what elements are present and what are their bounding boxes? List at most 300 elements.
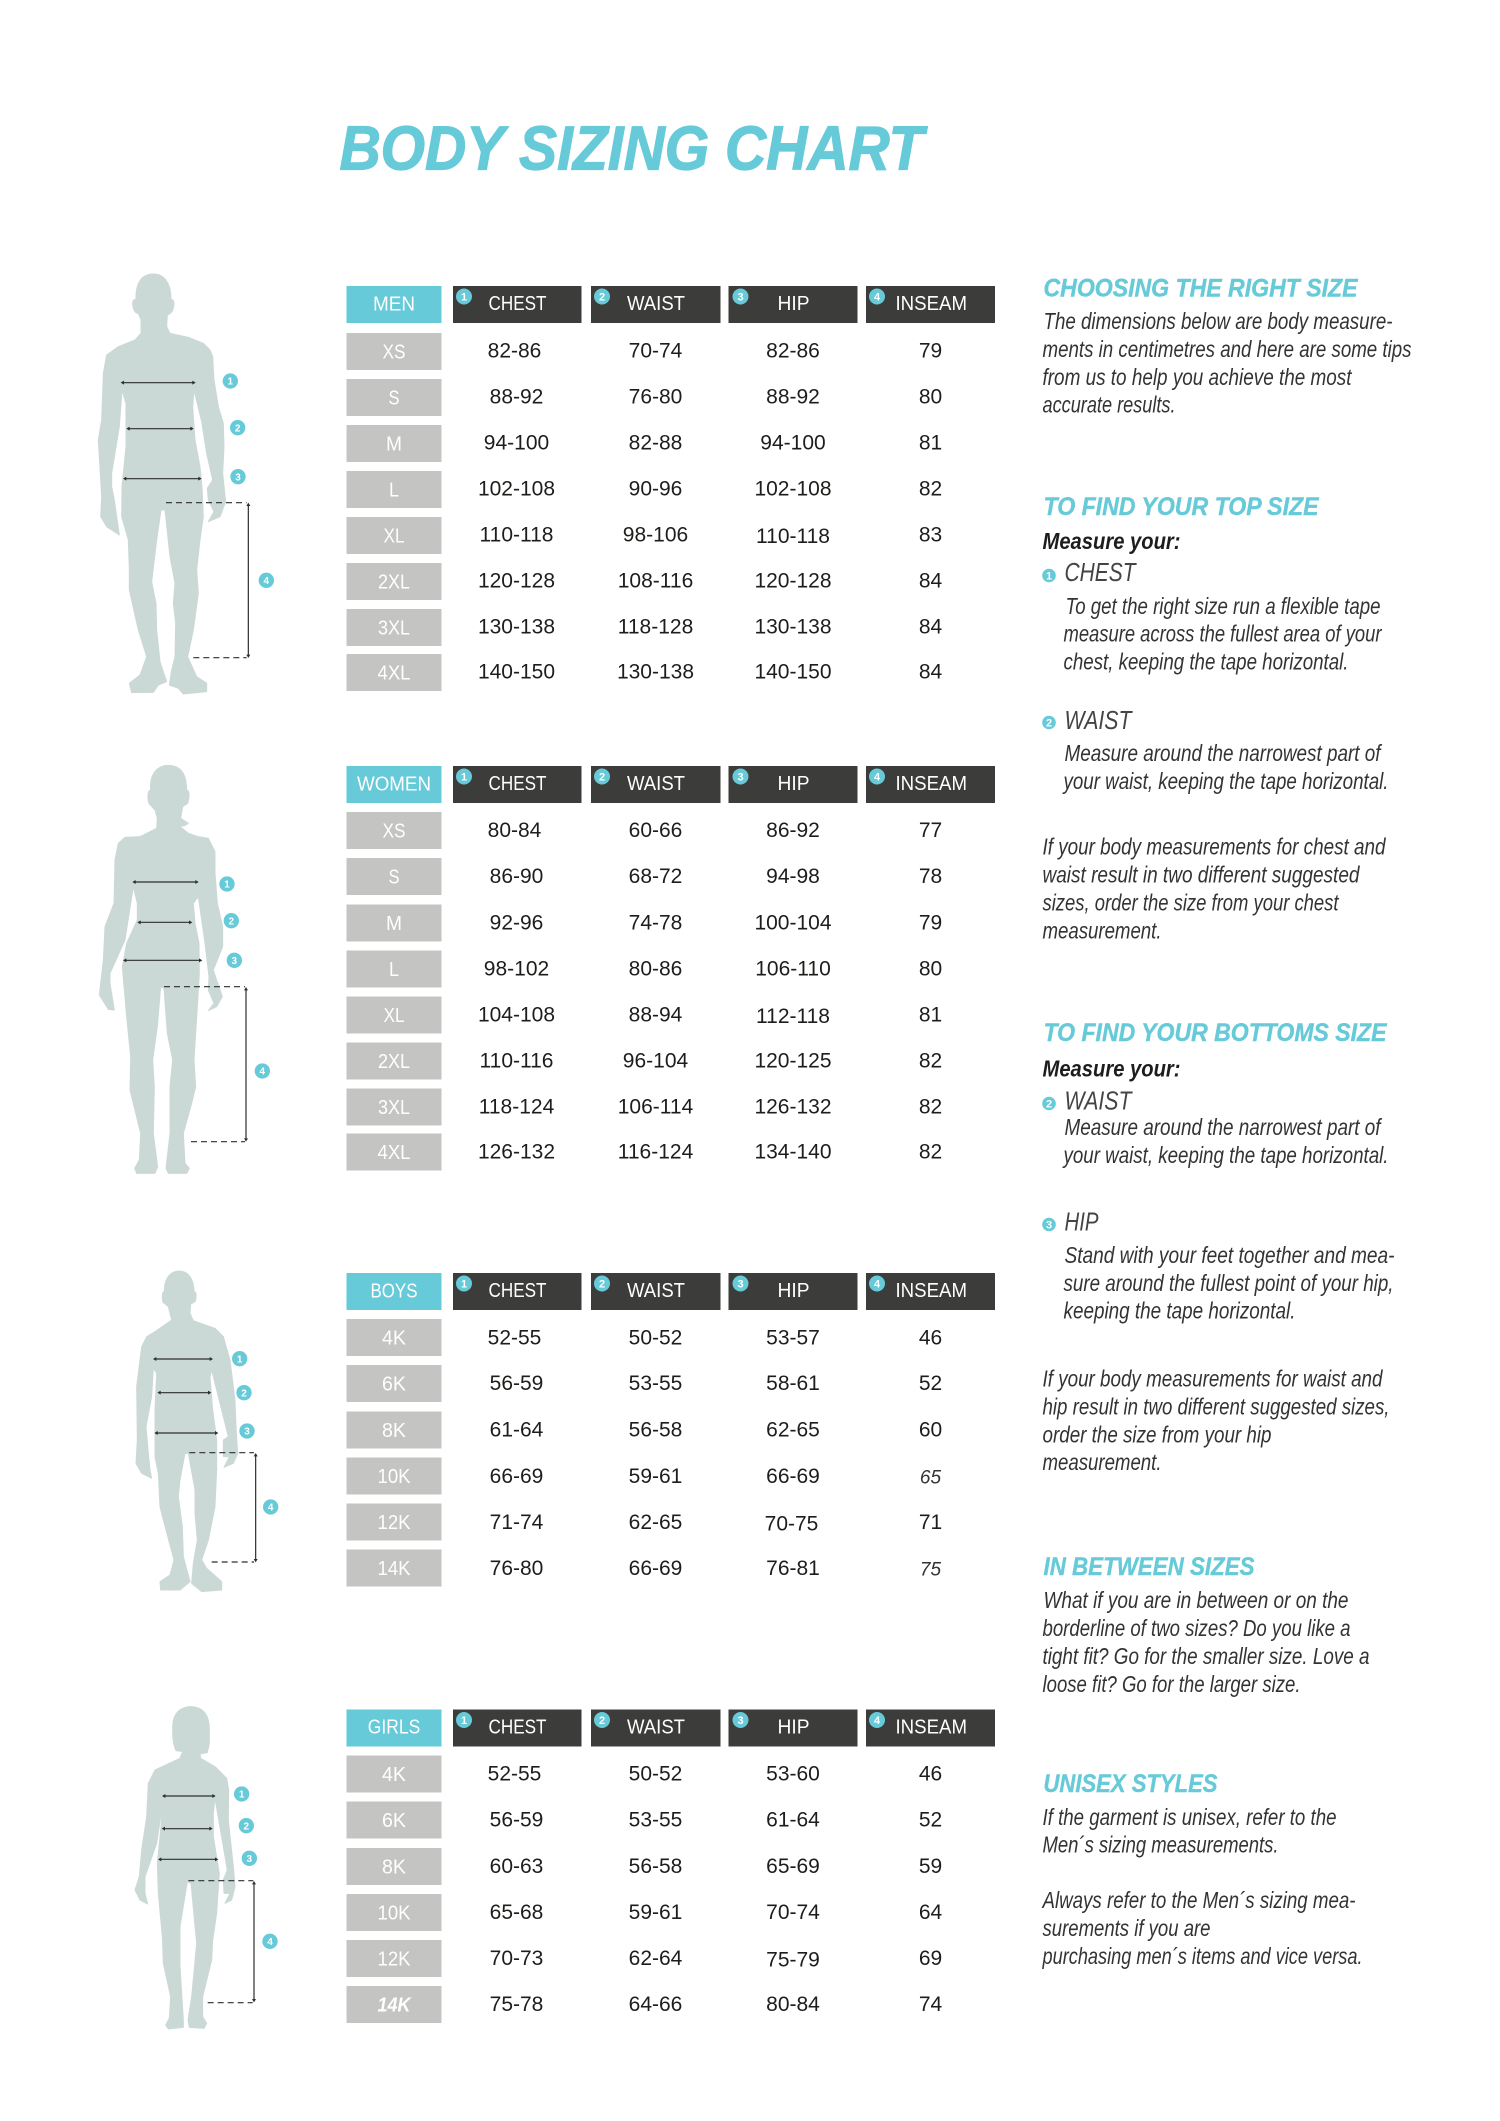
heading: CHOOSING THE RIGHT SIZE <box>1044 274 1359 302</box>
row 4K <box>346 1756 942 1792</box>
measurement lines: boys <box>153 1357 258 1562</box>
row 6K: 52 <box>919 1808 942 1832</box>
row 4XL: 4XL <box>378 1142 410 1164</box>
badge 2: 2 <box>229 916 235 927</box>
row 10K: 59-61 <box>629 1901 682 1924</box>
row XL: 81 <box>919 1004 942 1026</box>
row XS: 60-66 <box>629 819 682 842</box>
measurement lines: men <box>121 381 250 658</box>
row 3XL <box>346 609 942 646</box>
chest heading: 1 <box>1046 570 1052 582</box>
silhouette: woman <box>99 765 223 1173</box>
waist text: Measure around the narrowest part of <box>1064 1114 1383 1140</box>
note text: measurement. <box>1042 918 1162 944</box>
panel: unisex styles <box>1041 1770 1362 1969</box>
hip heading: 3 <box>1046 1220 1052 1232</box>
row 3XL: 84 <box>919 616 942 638</box>
row 8K: 8K <box>382 1856 407 1878</box>
row S: 78 <box>919 865 942 888</box>
row XL: 110-118 <box>756 525 830 548</box>
row 4XL: 140-150 <box>478 660 555 684</box>
heading: IN BETWEEN SIZES <box>1044 1553 1255 1581</box>
badge 4: 4 <box>260 1067 266 1078</box>
waist heading: 2 <box>1046 718 1052 730</box>
row L: 106-110 <box>755 958 831 980</box>
header row: men <box>346 286 995 323</box>
header row: women: 2 <box>599 772 605 784</box>
row S <box>346 379 942 416</box>
waist text: Measure around the narrowest part of <box>1064 740 1383 766</box>
waist heading: WAIST <box>1064 705 1133 735</box>
row 6K: 6K <box>382 1810 407 1832</box>
header row: girls: GIRLS <box>368 1716 420 1738</box>
row 10K: 64 <box>919 1901 942 1924</box>
row 10K: 65 <box>920 1468 941 1488</box>
row L: 82 <box>919 478 942 500</box>
text: What if you are in between or on the <box>1044 1587 1348 1613</box>
header row: girls: 4 <box>874 1715 881 1727</box>
row L: 102-108 <box>478 478 555 500</box>
header row: boys: HIP <box>778 1280 810 1302</box>
row L: 80-86 <box>629 958 682 980</box>
header row: women <box>346 766 995 803</box>
text <box>1042 1587 1370 1697</box>
row 4K: 52-55 <box>488 1326 541 1350</box>
row 6K: 6K <box>382 1374 407 1396</box>
row 3XL: 118-128 <box>618 616 693 638</box>
row 8K <box>346 1848 942 1885</box>
hip text: Stand with your feet together and mea- <box>1064 1242 1395 1268</box>
waist heading <box>1042 1086 1133 1116</box>
note text <box>1042 1366 1390 1475</box>
subheading: Measure your: <box>1042 1056 1180 1082</box>
figure: boys <box>136 1271 278 1592</box>
row 6K: 52 <box>919 1372 942 1395</box>
row 8K: 62-65 <box>766 1418 820 1442</box>
row L: 90-96 <box>629 478 682 500</box>
row 4K: 50-52 <box>629 1326 682 1350</box>
header row: women: 3 <box>737 772 744 784</box>
note text <box>1042 834 1386 944</box>
row XS <box>346 333 942 370</box>
row S: 88-92 <box>766 386 820 408</box>
row 2XL: 120-128 <box>754 570 832 592</box>
badge 1: 1 <box>239 1790 245 1801</box>
row 2XL <box>346 563 942 600</box>
row 2XL <box>346 1042 942 1080</box>
row XL <box>346 517 942 554</box>
header row: girls: 1 <box>461 1715 467 1727</box>
row 6K: 53-55 <box>629 1808 682 1832</box>
row 6K: 56-59 <box>490 1372 543 1395</box>
header row: men: 3 <box>737 292 744 304</box>
row M <box>346 425 942 462</box>
panel: choosing the right size <box>1042 274 1412 418</box>
header row: women: WOMEN <box>357 774 431 796</box>
waist text: your waist, keeping the tape horizontal. <box>1062 768 1388 794</box>
row S: 80 <box>919 386 942 408</box>
row 14K: 80-84 <box>766 1993 820 2016</box>
row 14K: 14K <box>378 1994 412 2016</box>
panel: bottoms size <box>1042 1019 1395 1475</box>
row 8K: 65-69 <box>766 1855 820 1878</box>
intro text: from us to help you achieve the most <box>1042 364 1353 390</box>
row XS: 86-92 <box>766 819 820 842</box>
row 4XL: 82 <box>919 1140 942 1164</box>
text one: Men´s sizing measurements. <box>1042 1832 1278 1858</box>
row XL: 98-106 <box>623 524 688 546</box>
silhouette: man <box>98 274 226 694</box>
heading: TO FIND YOUR TOP SIZE <box>1044 493 1320 521</box>
row 6K: 53-55 <box>629 1372 682 1395</box>
header row: boys: WAIST <box>627 1280 685 1302</box>
waist text <box>1062 740 1388 794</box>
row XL: 88-94 <box>629 1004 683 1026</box>
header row: women: 4 <box>874 772 881 784</box>
row 4K: 4K <box>382 1764 407 1786</box>
chest text <box>1064 593 1383 674</box>
row 4XL: 116-124 <box>618 1140 694 1164</box>
header row: girls: HIP <box>778 1716 810 1738</box>
subheading: Measure your: <box>1042 528 1180 554</box>
row 4XL <box>346 1134 942 1170</box>
row M: 74-78 <box>629 912 682 934</box>
intro text <box>1042 308 1412 418</box>
hip heading <box>1042 1206 1099 1236</box>
row S: S <box>388 866 400 888</box>
header row: women: CHEST <box>488 773 546 795</box>
badge 1 <box>234 1786 249 1802</box>
row M: 82-88 <box>629 432 682 454</box>
waist text <box>1062 1114 1388 1168</box>
header row: men: MEN <box>373 294 415 316</box>
table: girls <box>346 1710 995 2023</box>
row XS: 79 <box>919 340 942 362</box>
row S: 68-72 <box>629 865 682 888</box>
header row: girls: WAIST <box>627 1716 685 1738</box>
intro text: accurate results. <box>1042 392 1176 418</box>
row 4K: 53-60 <box>766 1762 820 1786</box>
row 4XL: 134-140 <box>754 1140 832 1164</box>
row 3XL: 130-138 <box>478 616 555 638</box>
row 2XL: 120-128 <box>478 570 555 592</box>
row M: 92-96 <box>490 912 543 934</box>
note text: order the size from your hip <box>1042 1422 1272 1448</box>
row 10K: 59-61 <box>629 1465 682 1488</box>
row 4K: 46 <box>919 1762 942 1786</box>
row 4XL: 4XL <box>378 662 410 684</box>
badge 3 <box>239 1423 255 1439</box>
header row: girls <box>346 1710 995 1746</box>
chest heading: CHEST <box>1064 557 1137 587</box>
row 6K: 61-64 <box>766 1808 820 1832</box>
row 6K: 56-59 <box>490 1808 543 1832</box>
header row: boys: 4 <box>874 1278 881 1290</box>
row 2XL: 108-116 <box>618 570 693 592</box>
row 3XL <box>346 1088 942 1126</box>
note text: If your body measurements for chest and <box>1042 834 1386 860</box>
badge 3 <box>230 469 246 484</box>
header row: boys: CHEST <box>488 1280 546 1302</box>
row 12K: 70-73 <box>490 1947 543 1970</box>
row 4K: 52-55 <box>488 1762 541 1786</box>
row XS: XS <box>382 820 406 842</box>
row M <box>346 904 942 942</box>
badge 3: 3 <box>232 956 238 967</box>
row S: 94-98 <box>766 865 820 888</box>
row 14K: 66-69 <box>629 1557 682 1580</box>
header row: men: 4 <box>874 292 881 304</box>
badge 4: 4 <box>264 576 270 587</box>
row 12K: 12K <box>378 1512 411 1534</box>
badge 3 <box>227 953 242 968</box>
row XL: 104-108 <box>478 1004 555 1026</box>
row 8K: 60 <box>919 1418 942 1442</box>
chest text: To get the right size run a flexible tape <box>1066 593 1380 619</box>
row 3XL: 118-124 <box>479 1096 555 1118</box>
header row: women: 1 <box>461 772 467 784</box>
row 8K: 56-58 <box>629 1418 682 1442</box>
header row: girls: INSEAM <box>896 1716 967 1738</box>
measurement lines: women <box>123 880 248 1142</box>
header row: boys: INSEAM <box>896 1280 967 1302</box>
row S <box>346 858 942 895</box>
row 4XL: 140-150 <box>754 660 832 684</box>
row S: 86-90 <box>490 865 543 888</box>
row 10K: 66-69 <box>490 1465 543 1488</box>
header row: girls: 2 <box>599 1715 605 1727</box>
header row: boys: 1 <box>461 1278 467 1290</box>
row 10K: 10K <box>378 1902 411 1924</box>
row 3XL: 106-114 <box>618 1096 694 1118</box>
note text: waist result in two different suggested <box>1042 862 1360 888</box>
row S: 88-92 <box>490 386 543 408</box>
badge 4: 4 <box>268 1503 274 1514</box>
header row: men: WAIST <box>627 293 685 315</box>
row L: 102-108 <box>754 478 832 500</box>
badge 2 <box>224 913 239 928</box>
waist heading <box>1042 705 1133 735</box>
text two: surements if you are <box>1042 1915 1210 1941</box>
row M: M <box>386 913 402 935</box>
text one <box>1042 1804 1336 1858</box>
header row: boys: BOYS <box>370 1280 418 1302</box>
badge 2 <box>230 420 245 435</box>
badge 3: 3 <box>235 472 241 483</box>
header row: men: 2 <box>599 292 605 304</box>
badge 2: 2 <box>244 1821 250 1832</box>
row 8K: 61-64 <box>490 1418 544 1442</box>
waist text: your waist, keeping the tape horizontal. <box>1062 1142 1388 1168</box>
badge 2: 2 <box>241 1388 247 1399</box>
row 12K: 12K <box>378 1948 411 1970</box>
header row: girls: 3 <box>737 1715 744 1727</box>
row XS: XS <box>382 342 406 364</box>
row XS: 82-86 <box>766 340 820 362</box>
row 10K <box>346 1894 942 1931</box>
row 3XL: 126-132 <box>754 1096 832 1118</box>
row 12K <box>346 1504 942 1540</box>
row 2XL: 110-116 <box>480 1050 553 1072</box>
panel: in between sizes <box>1042 1553 1370 1697</box>
row M: M <box>386 434 402 456</box>
row XL: 110-118 <box>480 524 553 546</box>
note text: hip result in two different suggested sizes, <box>1042 1394 1390 1420</box>
row 8K: 59 <box>919 1855 942 1878</box>
row XL: 112-118 <box>756 1005 830 1028</box>
row 14K: 76-81 <box>766 1557 820 1580</box>
text two <box>1041 1887 1362 1969</box>
row S: S <box>388 388 400 410</box>
row 8K <box>346 1412 942 1448</box>
note text: If your body measurements for waist and <box>1042 1366 1383 1392</box>
row 12K: 71 <box>919 1511 942 1534</box>
row 14K: 14K <box>378 1558 411 1580</box>
row XL <box>346 996 942 1034</box>
chest text: measure across the fullest area of your <box>1064 620 1383 646</box>
header row: boys <box>346 1273 995 1310</box>
row 10K: 70-74 <box>766 1901 820 1924</box>
row 14K: 75-78 <box>490 1993 543 2016</box>
badge 2 <box>236 1385 252 1400</box>
title: BODY SIZING CHART <box>340 114 928 184</box>
row XL: 83 <box>919 524 942 546</box>
silhouette: girl <box>135 1707 235 2029</box>
badge 4: 4 <box>267 1937 273 1948</box>
badge 1: 1 <box>224 880 230 891</box>
note text: sizes, order the size from your chest <box>1042 890 1340 916</box>
header row: boys: 3 <box>737 1278 744 1290</box>
row L: L <box>389 959 399 981</box>
panel: top size <box>1042 493 1388 944</box>
badge 4 <box>262 1934 278 1949</box>
header row: women: INSEAM <box>896 773 967 795</box>
row 8K: 8K <box>382 1420 407 1442</box>
row 3XL: 82 <box>919 1096 942 1118</box>
table: boys <box>346 1273 995 1586</box>
intro text: ments in centimetres and here are some tips <box>1042 336 1412 362</box>
row 6K <box>346 1802 942 1838</box>
row 6K: 58-61 <box>766 1372 820 1395</box>
silhouette: boy <box>136 1271 238 1592</box>
row 4K <box>346 1319 942 1356</box>
row 14K: 64-66 <box>629 1993 682 2016</box>
row 4K: 50-52 <box>629 1762 682 1786</box>
row XS <box>346 812 942 849</box>
row XS: 77 <box>919 819 942 842</box>
header row: girls: CHEST <box>488 1716 546 1738</box>
badge 4 <box>255 1063 270 1079</box>
row M: 79 <box>919 912 942 934</box>
row 2XL: 84 <box>919 570 942 592</box>
row 10K <box>346 1458 941 1494</box>
badge 3 <box>242 1851 257 1866</box>
row L: 98-102 <box>484 958 549 980</box>
waist heading: 2 <box>1046 1098 1052 1110</box>
row 8K: 56-58 <box>629 1855 682 1878</box>
row 12K: 70-75 <box>765 1512 818 1536</box>
badge 2 <box>239 1818 254 1833</box>
waist heading: WAIST <box>1064 1086 1133 1116</box>
row 14K: 76-80 <box>490 1557 543 1580</box>
badge 2: 2 <box>235 423 241 434</box>
header row: men: INSEAM <box>896 293 967 315</box>
row 4K: 4K <box>382 1328 407 1350</box>
header row: men: CHEST <box>488 293 546 315</box>
heading: TO FIND YOUR BOTTOMS SIZE <box>1044 1019 1388 1047</box>
badge 4 <box>259 573 274 588</box>
chest heading <box>1042 557 1137 587</box>
row 2XL: 82 <box>919 1050 942 1072</box>
text one: If the garment is unisex, refer to the <box>1042 1804 1336 1830</box>
header row: men: 1 <box>461 292 467 304</box>
row XL: XL <box>384 1005 404 1027</box>
row XS: 80-84 <box>488 819 542 842</box>
table: men <box>346 286 995 691</box>
badge 1: 1 <box>228 377 234 388</box>
badge 3: 3 <box>247 1854 253 1865</box>
header row: boys: 2 <box>599 1278 605 1290</box>
chest text: chest, keeping the tape horizontal. <box>1064 648 1348 674</box>
header row: women: WAIST <box>627 773 685 795</box>
row 8K: 60-63 <box>490 1855 543 1878</box>
row M: 100-104 <box>754 912 832 934</box>
badge 3: 3 <box>244 1427 250 1438</box>
row L: L <box>389 480 399 502</box>
row L <box>346 950 942 988</box>
row 2XL: 2XL <box>378 1051 410 1073</box>
row XS: 82-86 <box>488 340 541 362</box>
row 2XL: 2XL <box>378 572 410 594</box>
text two: Always refer to the Men´s sizing mea- <box>1041 1887 1356 1913</box>
hip heading: HIP <box>1064 1206 1099 1236</box>
hip text: keeping the tape horizontal. <box>1064 1298 1296 1324</box>
row 14K: 75 <box>920 1560 941 1580</box>
row 10K: 10K <box>378 1466 411 1488</box>
row 14K <box>346 1550 941 1586</box>
row 4XL: 130-138 <box>617 660 694 684</box>
hip text <box>1064 1242 1395 1324</box>
row 2XL: 120-125 <box>754 1050 832 1072</box>
row S: 76-80 <box>629 386 682 408</box>
row 4XL: 84 <box>919 660 942 684</box>
row 3XL: 3XL <box>378 1097 410 1119</box>
row 12K: 75-79 <box>766 1948 820 1972</box>
row M: 94-100 <box>760 432 826 454</box>
row 14K: 74 <box>919 1993 942 2016</box>
row 4XL: 126-132 <box>478 1140 555 1164</box>
row XL: XL <box>384 526 404 548</box>
row 3XL: 130-138 <box>754 616 832 638</box>
badge 1: 1 <box>237 1354 243 1365</box>
row 14K <box>346 1986 942 2023</box>
row 3XL: 3XL <box>378 618 410 640</box>
row 2XL: 96-104 <box>623 1050 689 1072</box>
row L: 80 <box>919 958 942 980</box>
text: tight fit? Go for the smaller size. Love a <box>1042 1643 1370 1669</box>
row 10K: 65-68 <box>490 1901 543 1924</box>
row XS: 70-74 <box>629 340 683 362</box>
table: women <box>346 766 995 1170</box>
row 12K: 71-74 <box>490 1511 544 1534</box>
row 12K: 62-64 <box>629 1947 683 1970</box>
header row: men: HIP <box>778 293 810 315</box>
row 12K: 62-65 <box>629 1511 682 1534</box>
text two: purchasing men´s items and vice versa. <box>1042 1943 1362 1969</box>
header row: women: HIP <box>778 773 810 795</box>
hip text: sure around the fullest point of your hip, <box>1064 1270 1394 1296</box>
figure: women <box>99 765 270 1173</box>
